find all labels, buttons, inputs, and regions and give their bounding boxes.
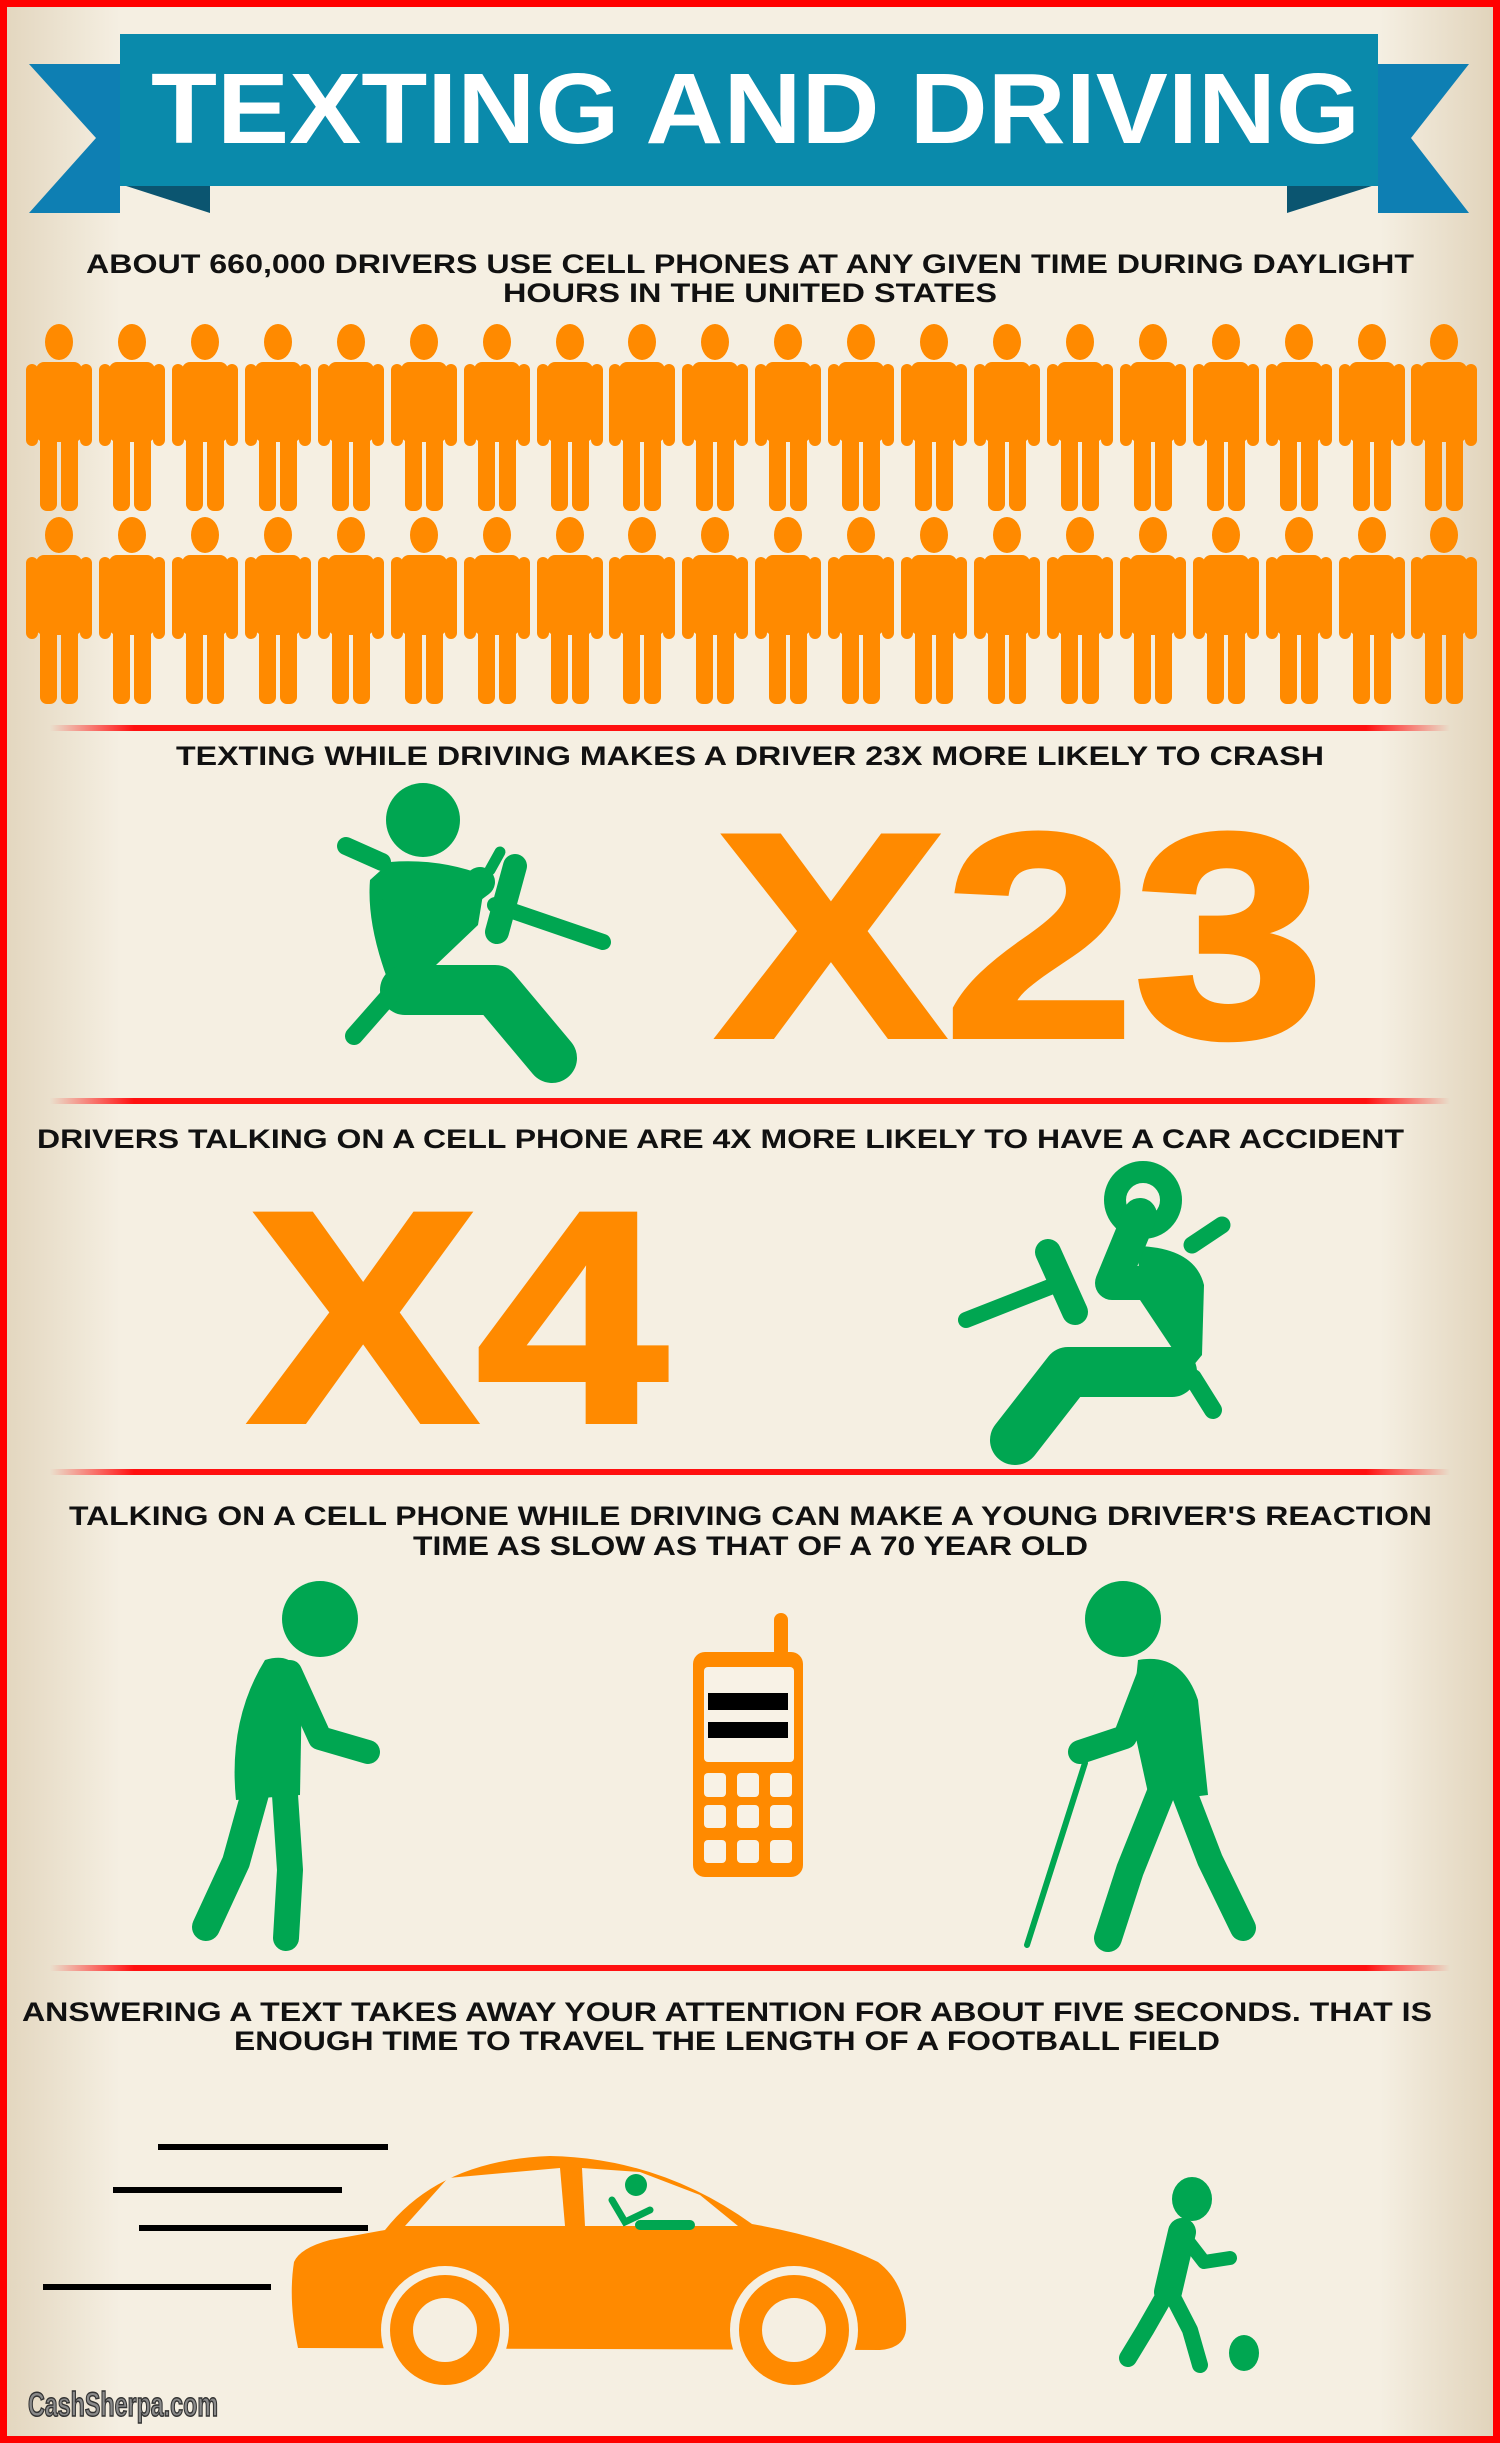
stat: X23: X23 (717, 774, 1324, 1098)
heading: 660,000 drivers: ABOUT 660,000 DRIVERS USE CELL PHONES AT ANY GIVEN TIME DURING DAYLIGHT (86, 249, 1415, 279)
icon: driver talking on phone (966, 1172, 1222, 1440)
heading: 660,000 drivers: HOURS IN THE UNITED STATES (503, 278, 997, 308)
icon: young walker (206, 1581, 368, 1938)
heading: 23x: TEXTING WHILE DRIVING MAKES A DRIVER 23X MORE LIKELY TO CRASH (176, 741, 1324, 771)
speed lines (43, 2144, 388, 2290)
heading: reaction time: TALKING ON A CELL PHONE WHILE DRIVING CAN MAKE A YOUNG DRIVER'S REACTION (69, 1501, 1432, 1531)
icon: phone (693, 1613, 803, 1877)
title: TEXTING AND DRIVING (151, 53, 1360, 165)
heading: football field: ANSWERING A TEXT TAKES AWAY YOUR ATTENTION FOR ABOUT FIVE SECONDS. THAT IS (22, 1997, 1432, 2027)
heading: football field: ENOUGH TIME TO TRAVEL THE LENGTH OF A FOOTBALL FIELD (234, 2026, 1220, 2056)
heading: reaction time: TIME AS SLOW AS THAT OF A 70 YEAR OLD (413, 1531, 1088, 1561)
watermark: CashSherpa.com (28, 2386, 218, 2424)
stat: X4: X4 (249, 1149, 669, 1485)
heading: 4x: DRIVERS TALKING ON A CELL PHONE ARE 4X MORE LIKELY TO HAVE A CAR ACCIDENT (37, 1124, 1405, 1154)
people pictogram (26, 324, 1477, 704)
heading: 660,000 drivers (86, 249, 1415, 308)
heading: football field (22, 1997, 1432, 2056)
heading: reaction time (69, 1501, 1432, 1561)
title banner (29, 34, 1469, 213)
icon: car (292, 2156, 906, 2394)
icon: texting driver (346, 783, 603, 1058)
icon: kid kicking ball (1128, 2177, 1259, 2371)
icon: old man with cane (1027, 1581, 1243, 1945)
